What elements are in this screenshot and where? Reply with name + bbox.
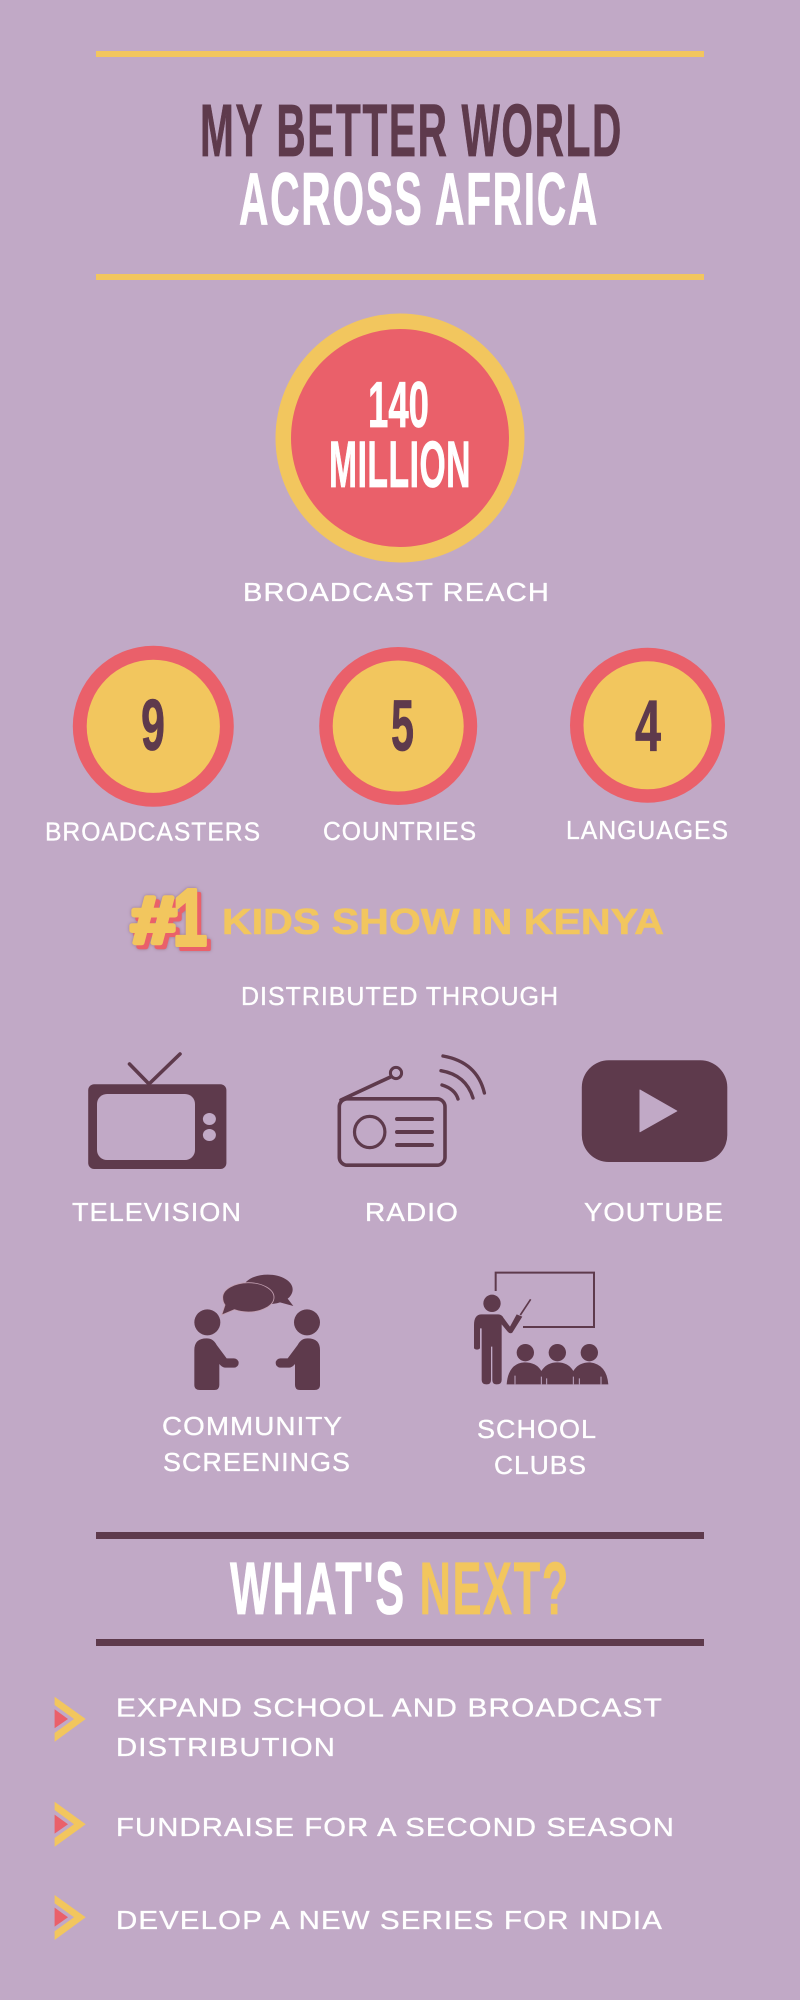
- icon: radio: [339, 1056, 484, 1165]
- next step: fundraise: FUNDRAISE FOR A SECOND SEASON: [116, 1812, 675, 1842]
- icon: arrow: [55, 1697, 86, 1742]
- stat: broadcast reach: MILLION: [329, 427, 471, 501]
- title: [200, 89, 623, 240]
- stat: languages: LANGUAGES: [566, 815, 729, 845]
- icon: two people talking: [194, 1275, 320, 1390]
- stat: broadcasters: [45, 646, 261, 846]
- stat: countries: [319, 647, 477, 846]
- heading: distributed through: DISTRIBUTED THROUGH: [241, 981, 559, 1011]
- callout: number one kids show: [131, 873, 664, 962]
- stat: broadcast reach: 140: [368, 368, 429, 441]
- stat: broadcast reach: [243, 314, 550, 607]
- next step: fundraise: [55, 1802, 675, 1847]
- channel: youtube: YOUTUBE: [584, 1197, 724, 1227]
- icon: arrow: [55, 1895, 86, 1940]
- next step: expand distribution: [55, 1692, 663, 1762]
- channel: community screenings: SCREENINGS: [163, 1447, 351, 1477]
- channel: community screenings: [162, 1275, 351, 1477]
- channel: school clubs: CLUBS: [494, 1450, 587, 1480]
- stat: languages: [566, 648, 729, 845]
- callout: number one kids show: #: [131, 883, 176, 957]
- stat: countries: COUNTRIES: [323, 816, 477, 846]
- icon: teacher and students: [474, 1273, 608, 1384]
- icon: television: [88, 1054, 226, 1169]
- channel: school clubs: SCHOOL: [477, 1414, 597, 1444]
- channel: radio: [339, 1056, 484, 1227]
- icon: youtube play button: [582, 1060, 727, 1162]
- icon: arrow: [55, 1802, 86, 1847]
- heading: what's next: WHAT'S NEXT?: [230, 1547, 570, 1630]
- channel: radio: RADIO: [365, 1197, 459, 1227]
- stat: broadcast reach: BROADCAST REACH: [243, 577, 550, 607]
- channel: youtube: [582, 1060, 727, 1227]
- next step: new series: DEVELOP A NEW SERIES FOR INDIA: [116, 1905, 663, 1935]
- channel: television: TELEVISION: [72, 1197, 242, 1227]
- stat: broadcasters: BROADCASTERS: [45, 816, 261, 846]
- stat: languages: 4: [635, 686, 661, 766]
- stat: countries: 5: [391, 686, 414, 766]
- callout: number one kids show: KIDS SHOW IN KENYA: [222, 901, 664, 942]
- callout: number one kids show: 1: [173, 873, 207, 962]
- channel: television: [72, 1054, 242, 1227]
- stat: broadcasters: 9: [141, 686, 165, 766]
- next step: expand distribution: DISTRIBUTION: [116, 1732, 336, 1762]
- next step: new series: [55, 1895, 663, 1940]
- next step: expand distribution: EXPAND SCHOOL AND BROADCAST: [116, 1692, 663, 1722]
- channel: school clubs: [474, 1273, 608, 1480]
- channel: community screenings: COMMUNITY: [162, 1411, 343, 1441]
